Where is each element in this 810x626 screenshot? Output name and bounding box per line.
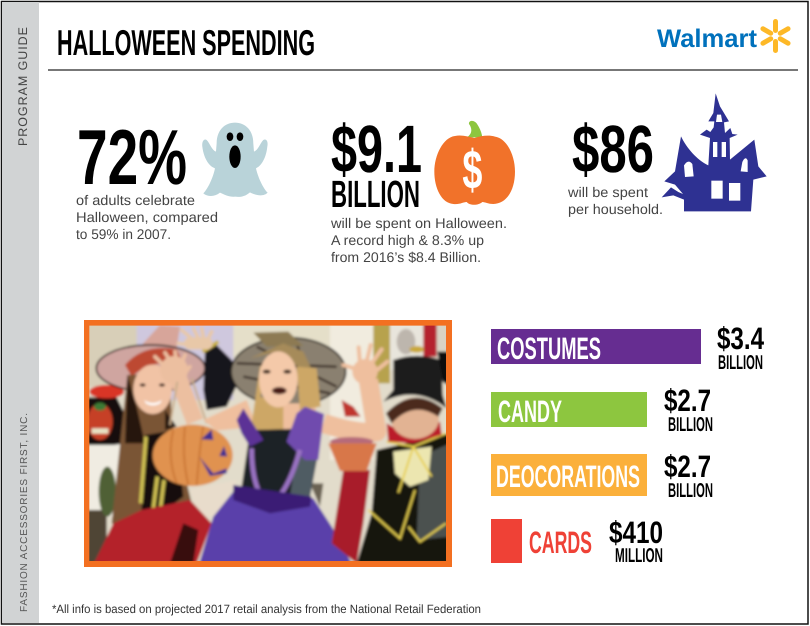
bar: costumes: $3.4 <box>717 321 765 356</box>
Walmart logo: Walmart <box>657 25 757 53</box>
description <box>567 184 663 217</box>
icon: ghost <box>202 123 268 197</box>
big number: 72% <box>77 113 187 201</box>
Walmart logo <box>657 19 791 53</box>
stat: 9.1 billion <box>330 112 515 265</box>
bar: decorations: $2.7 <box>664 449 711 484</box>
bar: candy: CANDY <box>498 394 562 429</box>
hand raised at top <box>178 328 212 345</box>
pumpkin bucket <box>170 378 207 425</box>
bar: candy: BILLION <box>668 414 713 436</box>
bar: decorations: DEOCORATIONS <box>496 459 640 494</box>
icon: haunted house <box>662 93 767 211</box>
bar: cards <box>491 515 663 567</box>
description <box>76 192 218 242</box>
description: Halloween, compared <box>76 209 218 225</box>
description <box>330 215 507 265</box>
dollar sign: $ <box>462 139 482 200</box>
big number: $9.1 <box>331 112 422 187</box>
footnote: *All info is based on projected 2017 retail analysis from the National Retail Federation <box>52 602 481 616</box>
bar: decorations: BILLION <box>668 480 713 502</box>
photo: children in Halloween costumes <box>83 320 453 567</box>
bar: candy <box>491 383 713 436</box>
description: of adults celebrate <box>76 192 195 208</box>
wall <box>89 354 446 561</box>
description: per household. <box>568 201 663 217</box>
billion label: BILLION <box>331 174 420 216</box>
stat: 72 percent <box>76 113 268 242</box>
sidebar <box>2 2 39 623</box>
big number: $86 <box>572 112 654 187</box>
bar: cards: $410 <box>609 515 663 550</box>
middle girl right arm and hand <box>323 380 377 432</box>
description: to 59% in 2007. <box>76 226 171 242</box>
icon: pumpkin <box>434 121 515 205</box>
sidebar label: company: FASHION ACCESSORIES FIRST, INC. <box>19 413 30 612</box>
bar: costumes: BILLION <box>718 352 763 374</box>
bar chart: spending categories <box>491 321 765 567</box>
bar: cards: CARDS <box>529 525 592 560</box>
title: HALLOWEEN SPENDING <box>57 22 315 63</box>
bar: costumes <box>491 321 765 374</box>
stat: 86 dollars <box>567 93 767 217</box>
middle girl <box>231 338 346 406</box>
bar: costumes: COSTUMES <box>497 331 601 366</box>
description: A record high & 8.3% up <box>331 232 484 248</box>
header rule <box>48 69 798 71</box>
description: from 2016’s $8.4 Billion. <box>331 249 481 265</box>
bar: decorations <box>491 449 713 502</box>
right side basket and boy <box>332 470 370 563</box>
bar: cards: MILLION <box>615 545 663 567</box>
left girl <box>142 325 180 348</box>
hand and arm holding pumpkin <box>178 378 195 422</box>
sidebar label: program guide: PROGRAM GUIDE <box>16 27 30 146</box>
bar: candy: $2.7 <box>664 383 711 418</box>
description: will be spent <box>567 184 648 200</box>
description: will be spent on Halloween. <box>330 215 507 231</box>
